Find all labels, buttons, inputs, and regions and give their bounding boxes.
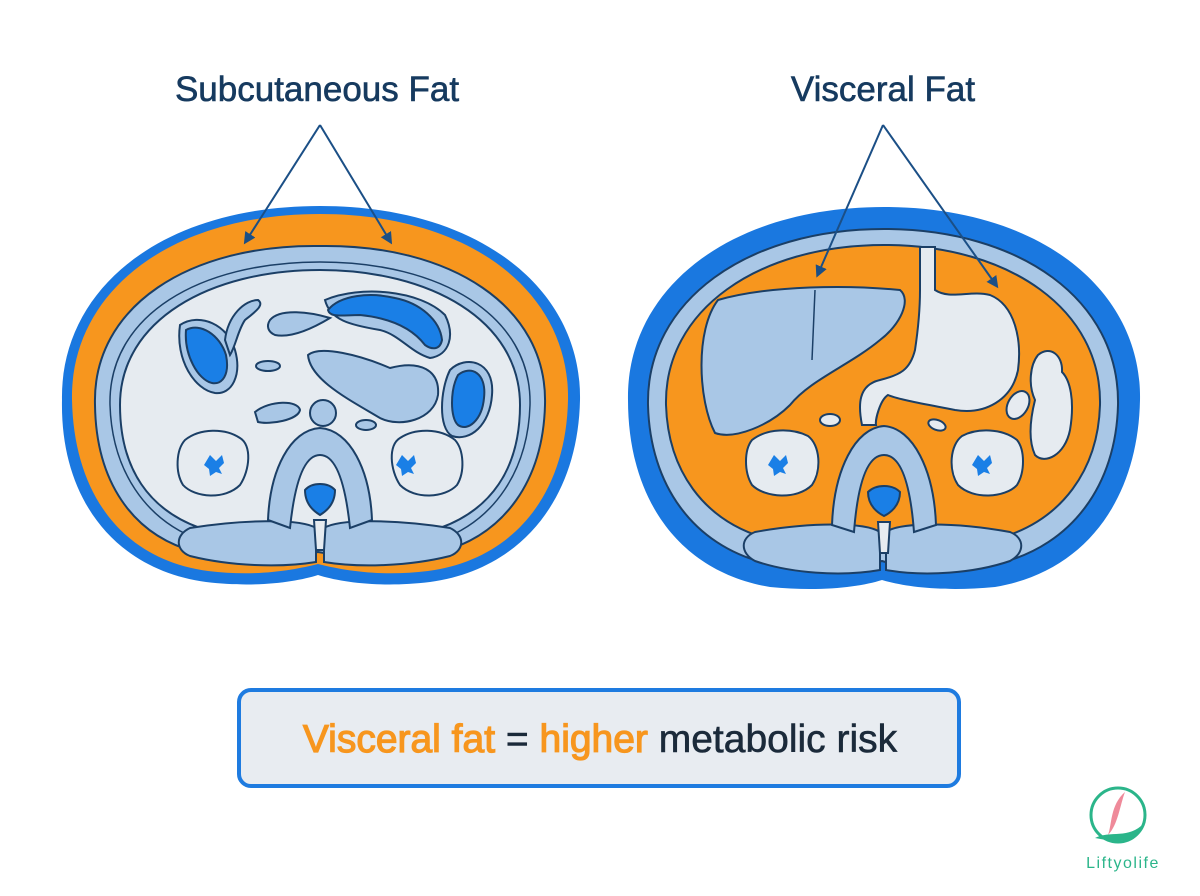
arrows: subcutaneous	[246, 125, 390, 241]
icon: kidney hilum left	[204, 455, 416, 476]
panel: subcutaneous cross-section	[62, 206, 580, 584]
logo: Liftyolife	[1086, 855, 1160, 872]
icon: kidney hilum right	[768, 455, 992, 476]
callout box	[239, 690, 959, 786]
arrows: visceral	[818, 125, 996, 285]
logo	[1086, 788, 1160, 872]
panel: visceral cross-section	[628, 207, 1140, 589]
title: visceral fat: Visceral Fat	[791, 70, 975, 109]
callout box: Visceral fat = higher metabolic risk	[303, 718, 898, 761]
title: subcutaneous fat: Subcutaneous Fat	[175, 70, 459, 109]
